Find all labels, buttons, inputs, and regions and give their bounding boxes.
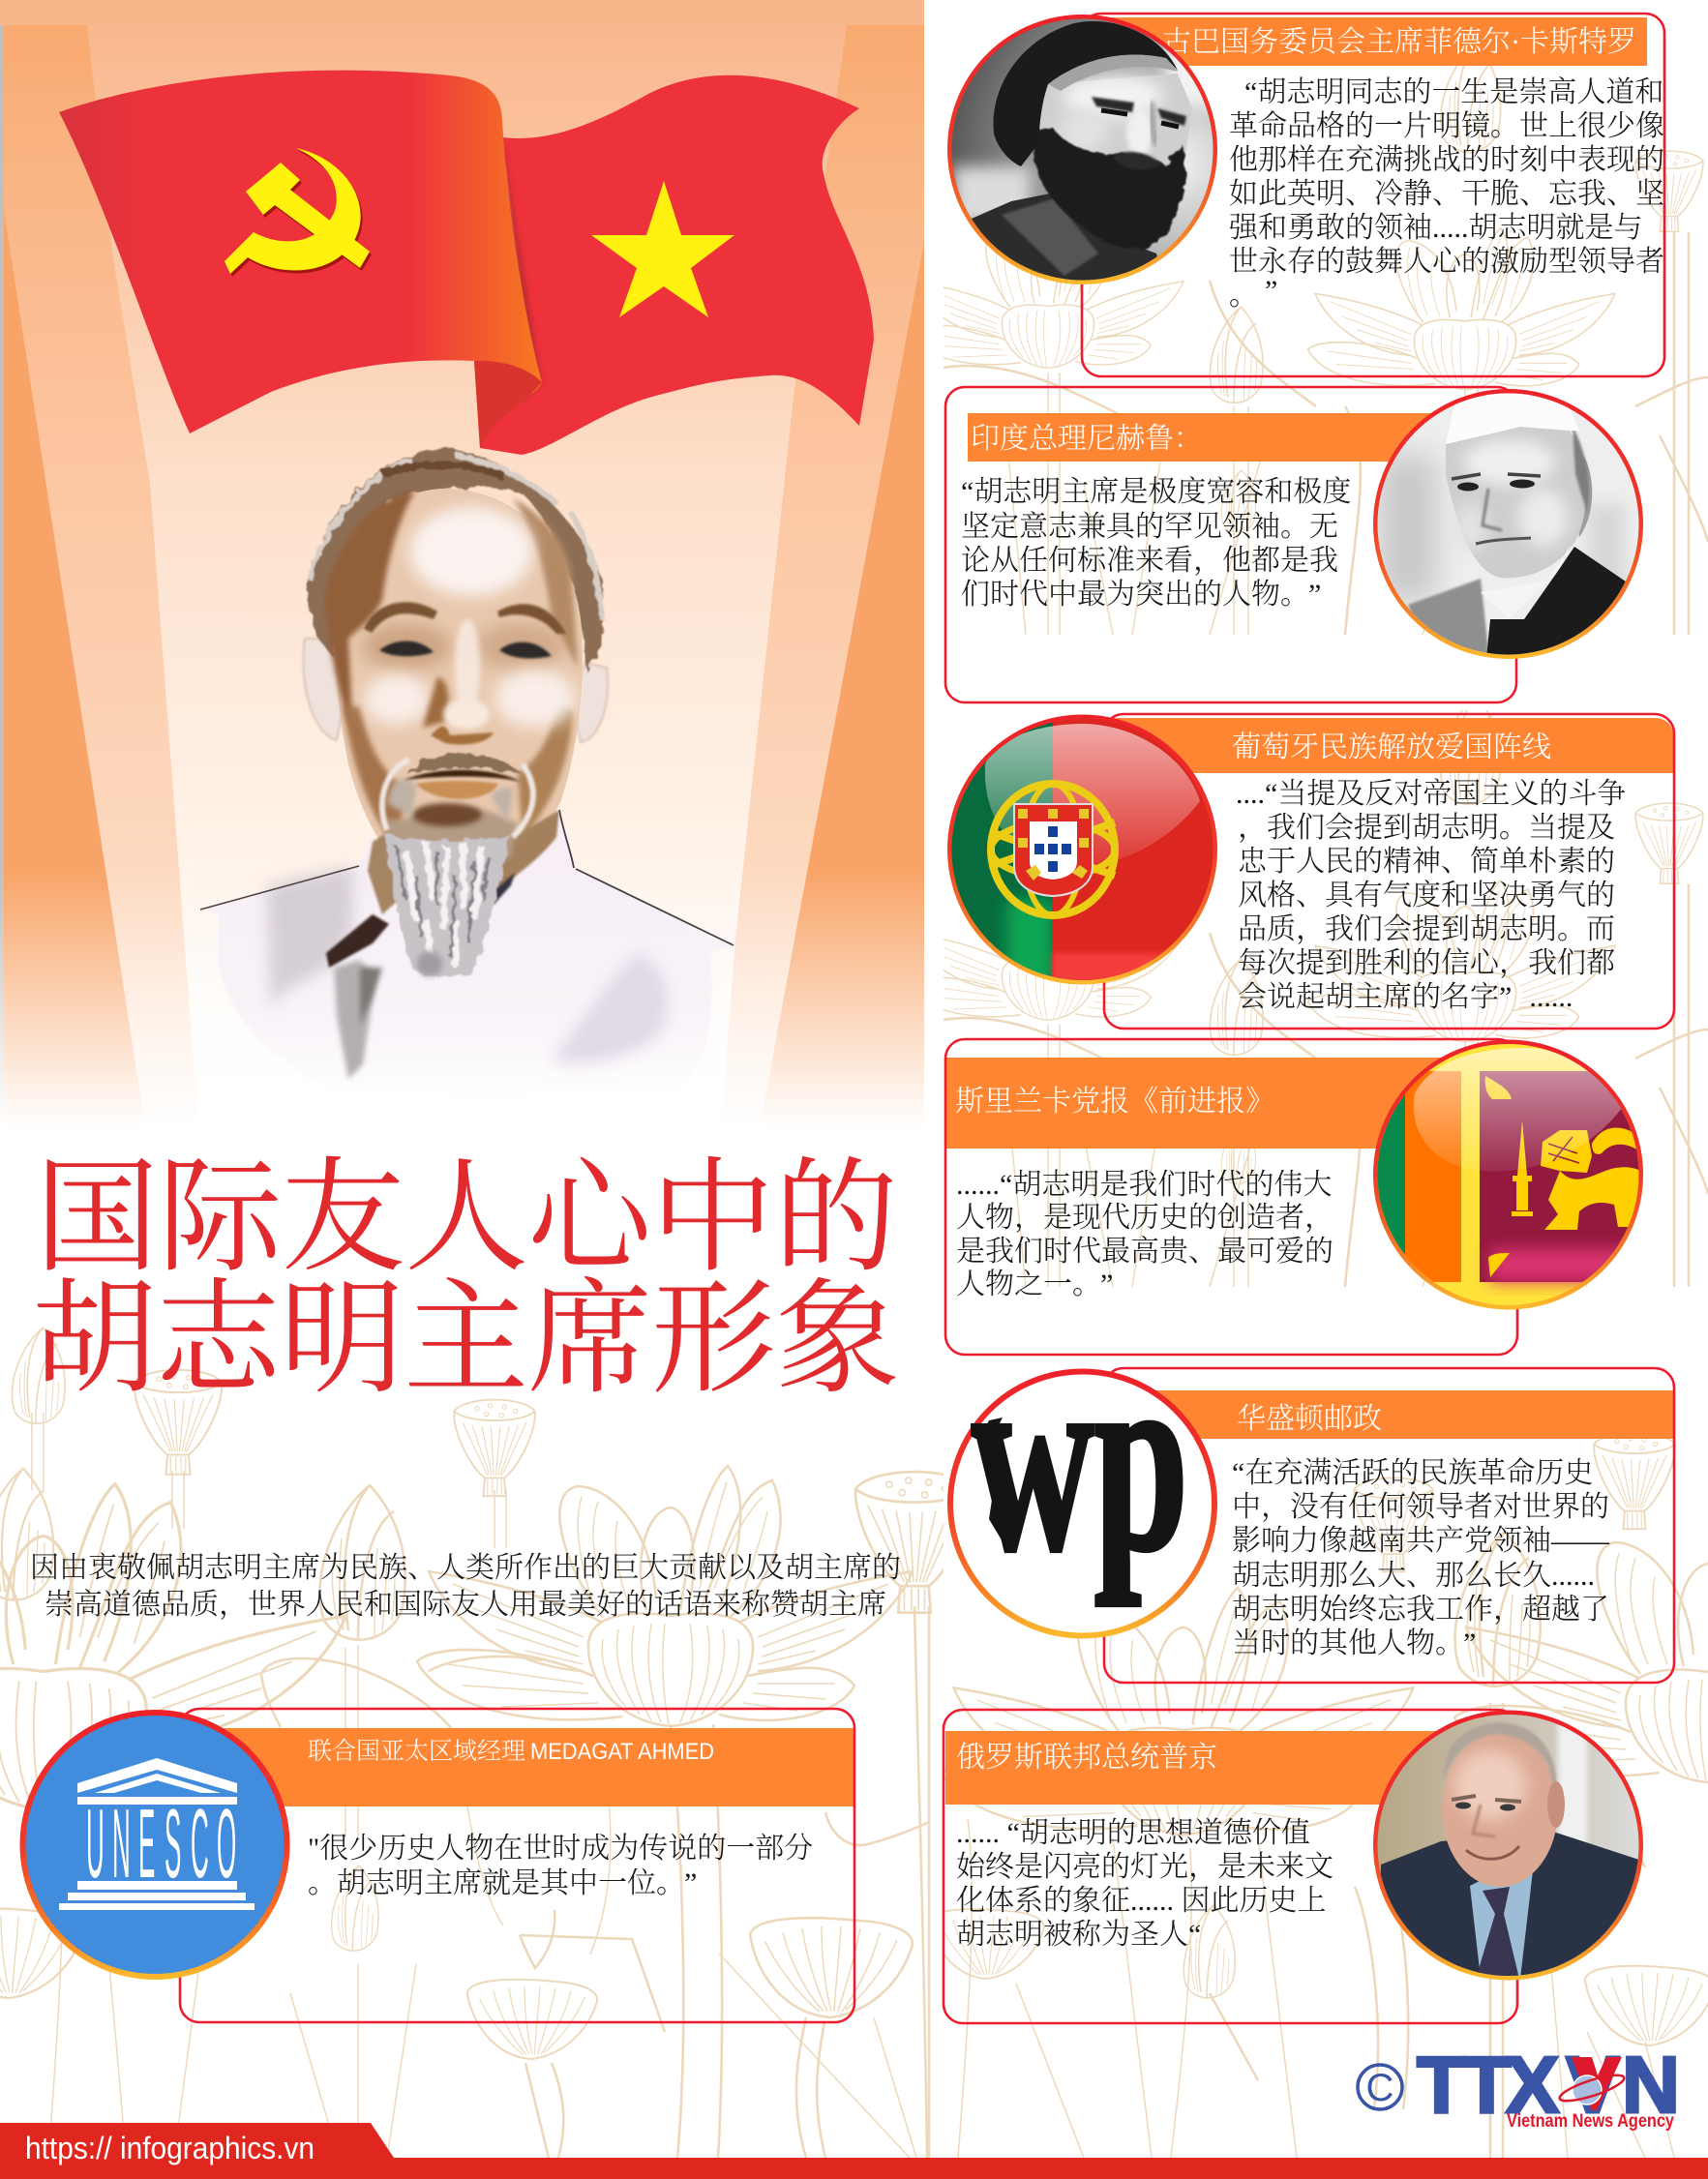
tunic bbox=[200, 810, 734, 1095]
shirt bbox=[972, 194, 1157, 281]
Castro quote: 如此英明、冷静、干脆、忘我、坚 bbox=[1229, 178, 1664, 210]
panel: Putin bbox=[944, 1710, 1645, 2023]
long beard bbox=[385, 834, 511, 977]
icon: UNESCO logo: UNESCO bbox=[86, 1788, 236, 1898]
beard bbox=[1034, 128, 1185, 250]
intro text: 因由衷敬佩胡志明主席为民族、人类所作出的巨大贡献以及胡主席的 bbox=[30, 1552, 901, 1584]
footer bar with website: https:// infographics.vn bbox=[25, 2131, 315, 2165]
Putin quote bbox=[956, 1817, 1333, 1951]
Portugal quote: 每次提到胜利的信心，我们都 bbox=[1238, 947, 1615, 979]
Nehru quote: 坚定意志兼具的罕见领袖。无 bbox=[961, 511, 1338, 543]
Nehru header bar bbox=[968, 413, 1452, 462]
face bbox=[1037, 74, 1192, 174]
Castro quote: “胡志明同志的一生是崇高人道和 bbox=[1244, 76, 1663, 108]
icon: Washington Post logo: wp bbox=[972, 1310, 1188, 1606]
face shading bbox=[324, 489, 578, 842]
Portugal quote: 风格、具有气度和坚决勇气的 bbox=[1238, 880, 1615, 911]
Sri Lanka quote: ......“胡志明是我们时代的伟大 bbox=[956, 1169, 1332, 1201]
title: 国际友人心中的 bbox=[35, 1149, 898, 1287]
flag: Vietnam star bbox=[474, 75, 874, 455]
logo: TTXVN Vietnam News Agency: TTXVN bbox=[1417, 2040, 1680, 2130]
hero background rays bbox=[0, 0, 924, 1127]
Castro quote: 他那样在充满挑战的时刻中表现的 bbox=[1229, 144, 1664, 176]
Sri Lanka quote: 人物，是现代历史的创造者， bbox=[956, 1202, 1333, 1234]
chin beard bbox=[385, 808, 518, 872]
Nehru quote: 们时代中最为突出的人物。 ” bbox=[961, 579, 1321, 611]
Washington Post quote: 当时的其他人物。 ” bbox=[1232, 1627, 1476, 1659]
sword bbox=[1512, 1120, 1533, 1216]
photo: Fidel Castro bbox=[948, 15, 1219, 290]
panel: Sri Lanka newspaper bbox=[945, 1039, 1645, 1355]
intro text bbox=[30, 1552, 901, 1621]
Portugal quote bbox=[1236, 778, 1626, 1013]
icon: UNESCO logo bbox=[23, 1713, 286, 1977]
Castro quote: 革命品格的一片明镜。世上很少像 bbox=[1229, 110, 1664, 142]
Sri Lanka header bar bbox=[945, 1058, 1449, 1149]
photo: Nehru bbox=[1374, 389, 1645, 668]
Portugal quote: ，我们会提到胡志明。当提及 bbox=[1238, 812, 1615, 844]
logo: TTXVN Vietnam News Agency: C bbox=[1366, 2067, 1393, 2109]
Castro quote: 强和勇敢的领袖.....胡志明就是与 bbox=[1229, 212, 1643, 244]
icon: Sri Lanka flag bbox=[1374, 1041, 1645, 1312]
armillary sphere and shield bbox=[991, 784, 1115, 915]
hair bbox=[307, 448, 603, 672]
Castro quote bbox=[1229, 76, 1664, 312]
Portugal quote: 会说起胡主席的名字” ...... bbox=[1238, 981, 1573, 1013]
Putin quote: ...... “胡志明的思想道德价值 bbox=[956, 1817, 1310, 1849]
Washington Post quote: 胡志明那么大、那么长久...... bbox=[1232, 1560, 1595, 1592]
UNESCO header bar: MEDAGAT AHMED bbox=[530, 1739, 714, 1765]
footer bar with website bbox=[0, 2123, 1708, 2179]
Sri Lanka quote bbox=[956, 1169, 1333, 1300]
Castro quote: 世永存的鼓舞人心的激励型领导者 bbox=[1229, 246, 1664, 278]
Washington Post quote: 中，没有任何领导者对世界的 bbox=[1232, 1491, 1609, 1523]
ears bbox=[303, 639, 348, 740]
UNESCO quote: 。胡志明主席就是其中一位。 ” bbox=[308, 1867, 697, 1899]
Portugal quote: 品质，我们会提到胡志明。而 bbox=[1238, 913, 1615, 945]
UNESCO header bar bbox=[180, 1728, 854, 1806]
Portugal header bar: 葡萄牙民族解放爱国阵线 bbox=[1232, 731, 1551, 763]
Castro quote: 。 bbox=[1229, 280, 1258, 312]
lion bbox=[1541, 1130, 1592, 1173]
photo: Putin bbox=[1374, 1711, 1645, 1984]
icon: hammer and sickle bbox=[225, 148, 372, 277]
Sri Lanka quote: 人物之一。 ” bbox=[956, 1269, 1113, 1300]
Washington Post header bar: 华盛顿邮政 bbox=[1237, 1403, 1382, 1435]
title bbox=[32, 1149, 900, 1409]
Castro header bar bbox=[1094, 17, 1647, 66]
Washington Post quote bbox=[1232, 1457, 1610, 1659]
Nehru header bar: 印度总理尼赫鲁： bbox=[971, 423, 1203, 455]
Putin header bar: 俄罗斯联邦总统普京 bbox=[956, 1742, 1217, 1774]
logo: TTXVN Vietnam News Agency: Vietnam News Agency bbox=[1507, 2111, 1674, 2132]
UNESCO header bar: 联合国亚太区域经理 bbox=[308, 1738, 525, 1765]
Nehru quote: “胡志明主席是极度宽容和极度 bbox=[961, 476, 1351, 508]
panel: Portuguese patriotic front bbox=[948, 714, 1674, 1029]
panel: Fidel Castro bbox=[948, 14, 1664, 376]
Portugal quote: 忠于人民的精神、简单朴素的 bbox=[1238, 846, 1615, 878]
Putin quote: 始终是闪亮的灯光，是未来文 bbox=[956, 1851, 1333, 1883]
panel: Nehru bbox=[945, 387, 1645, 702]
icon: Portugal flag bbox=[948, 716, 1217, 987]
portrait of President Ho Chi Minh bbox=[200, 448, 734, 1095]
beret bbox=[994, 21, 1178, 166]
UNESCO quote bbox=[308, 1833, 813, 1899]
hero illustration bbox=[0, 0, 924, 1127]
eyebrows and eyes bbox=[364, 602, 566, 658]
Nehru quote bbox=[961, 476, 1351, 611]
Washington Post quote: 影响力像越南共产党领袖—— bbox=[1232, 1525, 1610, 1557]
title: 胡志明主席形象 bbox=[32, 1270, 900, 1409]
moustache, mouth and beard bbox=[368, 753, 559, 977]
Putin header bar bbox=[945, 1731, 1449, 1805]
Washington Post quote: “在充满活跃的民族革命历史 bbox=[1232, 1457, 1593, 1489]
UNESCO quote: "很少历史人物在世时成为传说的一部分 bbox=[308, 1833, 813, 1865]
Nehru quote: 论从任何标准来看，他都是我 bbox=[961, 545, 1338, 577]
face bbox=[334, 489, 583, 861]
intro text: 崇高道德品质，世界人民和国际友人用最美好的话语来称赞胡主席 bbox=[45, 1589, 886, 1621]
Washington Post header bar bbox=[1113, 1390, 1673, 1439]
Washington Post quote: 胡志明始终忘我工作，超越了 bbox=[1232, 1594, 1609, 1626]
Sri Lanka quote: 是我们时代最高贵、最可爱的 bbox=[956, 1236, 1333, 1268]
panel: UNESCO bbox=[23, 1709, 854, 2022]
Putin quote: 化体系的象征...... 因此历史上 bbox=[956, 1885, 1326, 1917]
Castro quote: ” bbox=[1265, 275, 1277, 307]
panel: Washington Post bbox=[950, 1310, 1674, 1683]
flag: Party hammer and sickle bbox=[59, 71, 542, 448]
Castro header bar: 古巴国务委员会主席菲德尔·卡斯特罗 bbox=[1162, 26, 1636, 58]
Portugal header bar bbox=[1113, 718, 1673, 773]
Sri Lanka header bar: 斯里兰卡党报《前进报》 bbox=[955, 1086, 1274, 1118]
Portugal quote: ....“当提及反对帝国主义的斗争 bbox=[1236, 778, 1626, 810]
Putin quote: 胡志明被称为圣人“ bbox=[956, 1919, 1201, 1951]
